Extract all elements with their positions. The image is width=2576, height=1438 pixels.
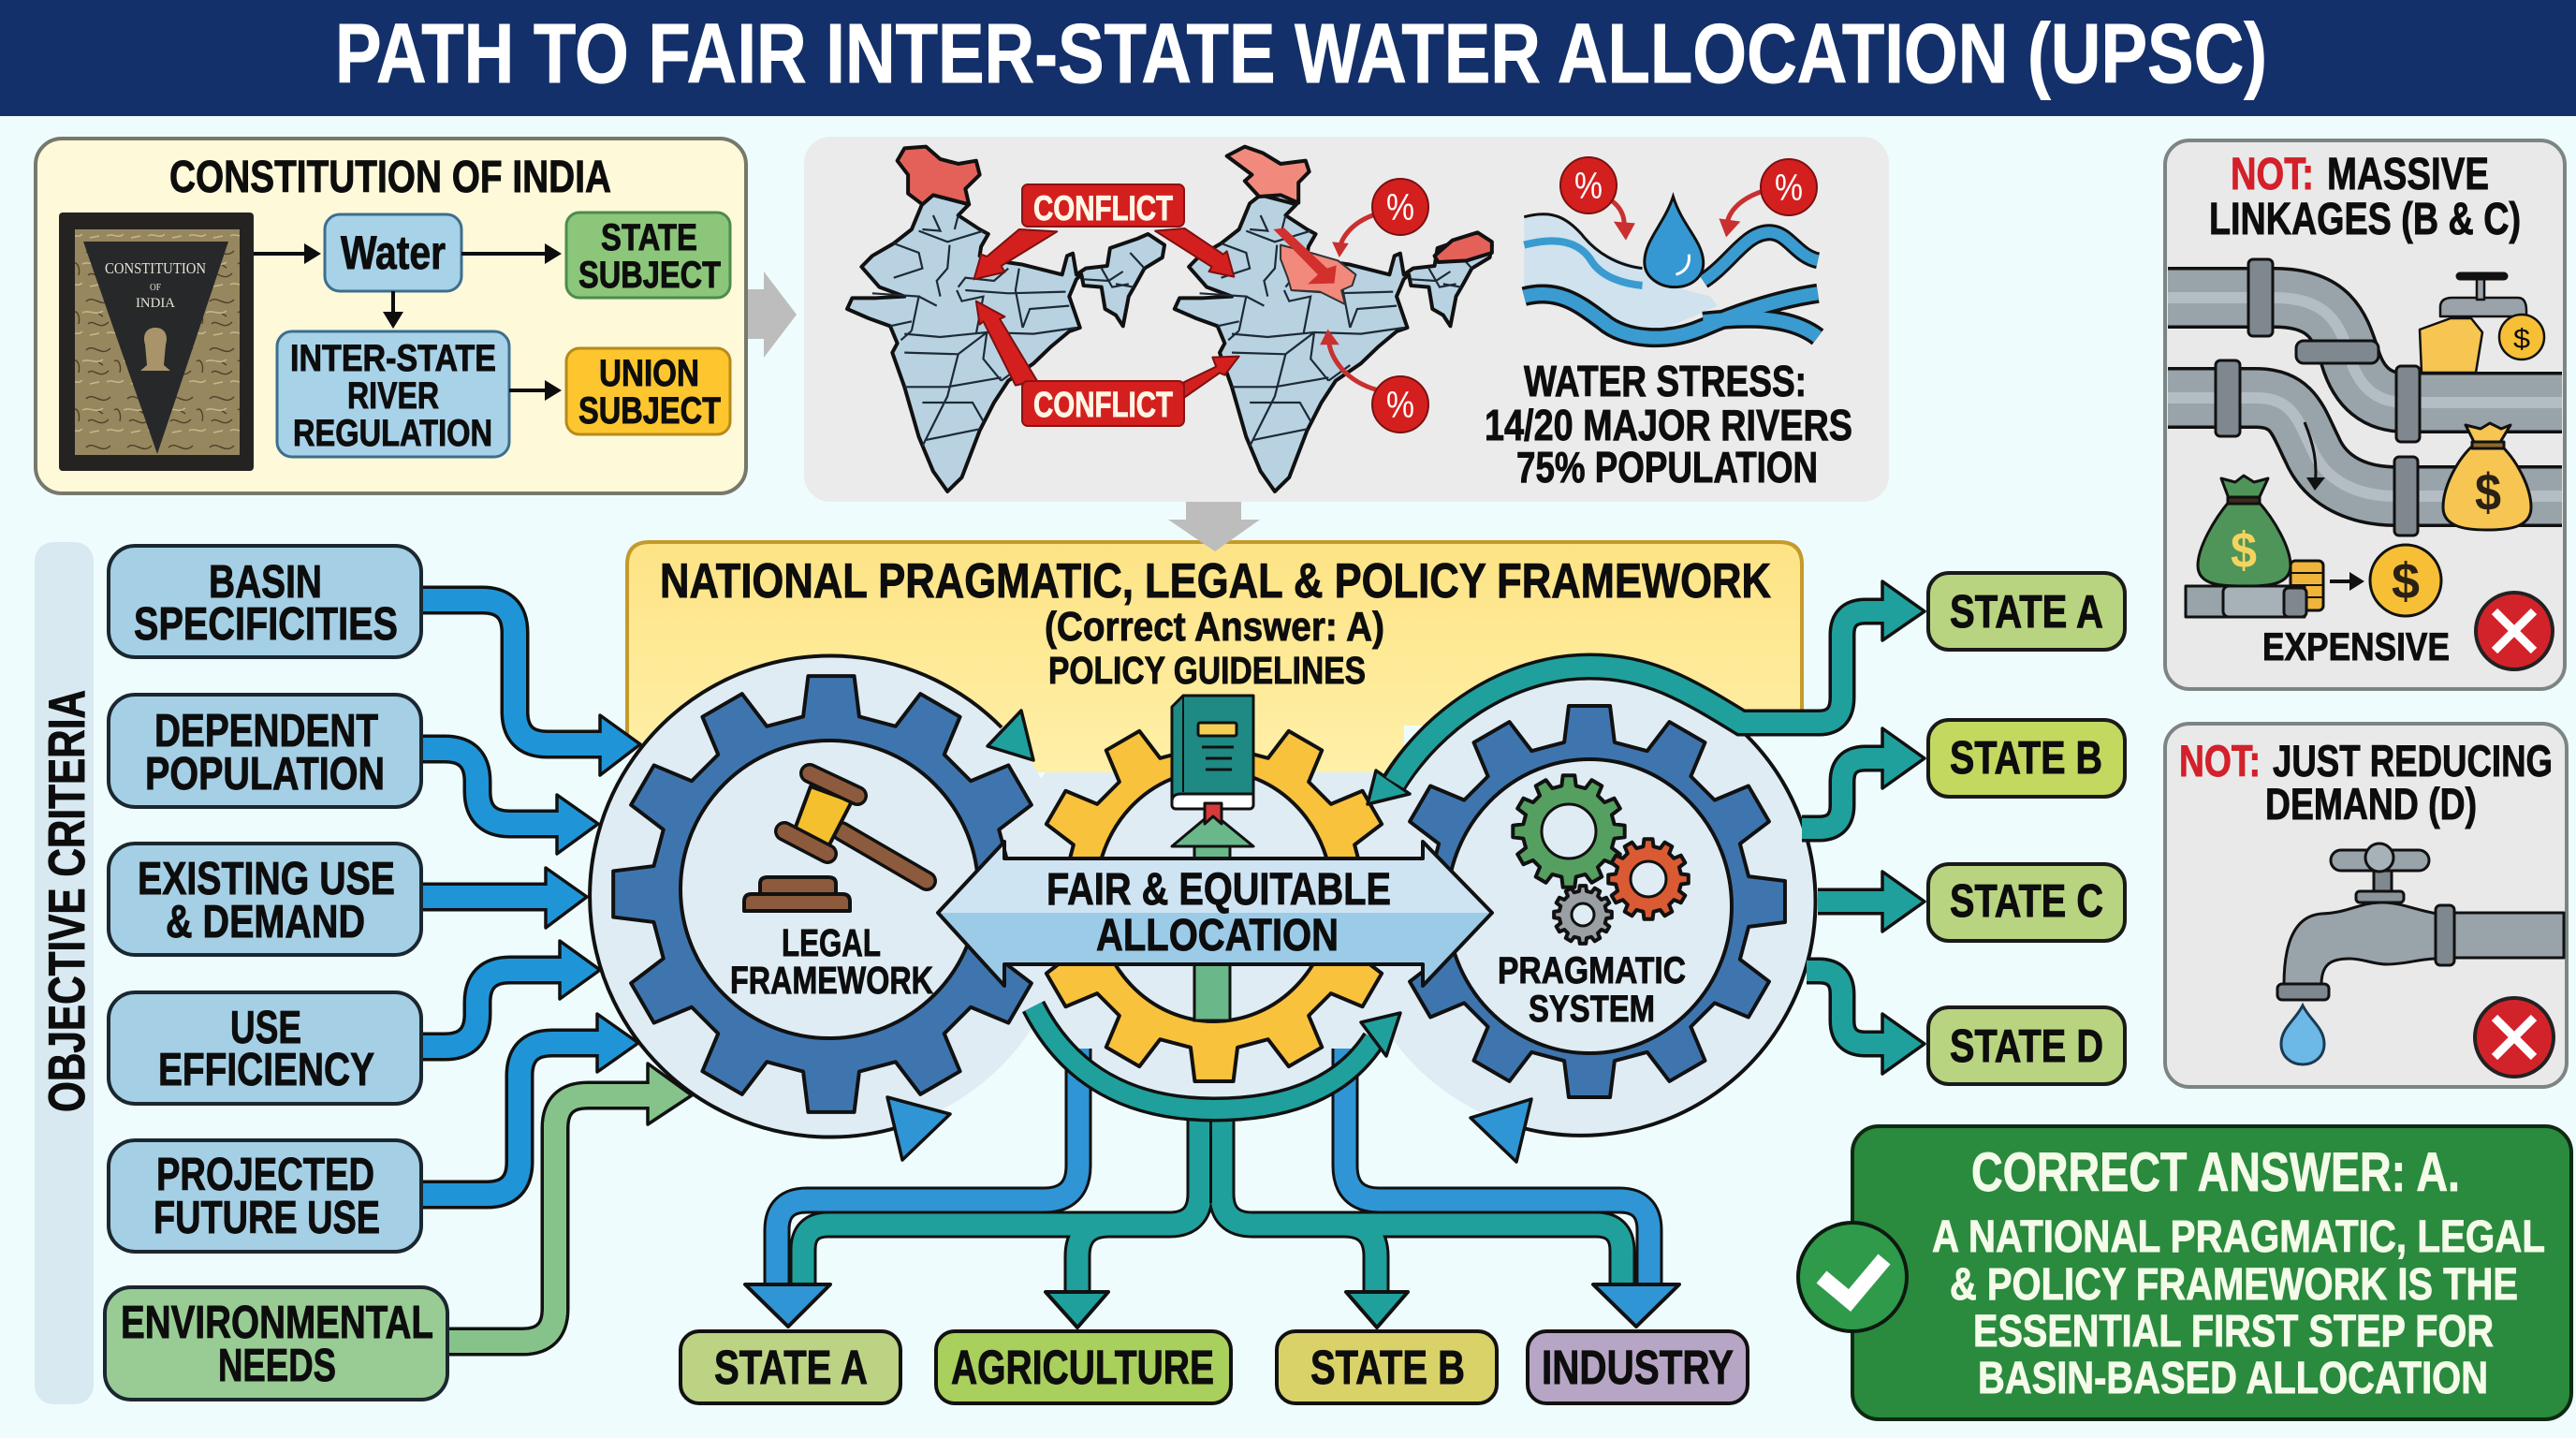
text: water stress: 14/20 MAJOR RIVERS xyxy=(1485,401,1852,449)
state d: STATE D xyxy=(1950,1021,2103,1072)
label: pragmatic system xyxy=(1498,950,1686,1030)
heading xyxy=(2179,736,2553,829)
icon: constitution book: OF xyxy=(150,283,161,293)
criterion: environmental needs: NEEDS xyxy=(218,1341,336,1391)
arrows: constitution flow xyxy=(254,243,562,401)
icon: water drop xyxy=(2281,1005,2324,1064)
icon: green money bag with coins xyxy=(2186,476,2323,617)
teal branches xyxy=(803,1105,1622,1294)
icon: small cogs xyxy=(1513,775,1689,944)
arc under central gear xyxy=(1033,1006,1400,1109)
state a xyxy=(1928,573,2125,650)
criterion: use efficiency: USE xyxy=(230,1003,301,1053)
sector: industry xyxy=(1528,1331,1748,1403)
criterion: existing use and demand: & DEMAND xyxy=(166,897,365,947)
label: policy guidelines: POLICY GUIDELINES xyxy=(1048,649,1366,692)
gear: pragmatic blue xyxy=(1394,668,1816,1136)
state b: STATE B xyxy=(1950,733,2102,784)
criterion: existing use and demand xyxy=(109,844,421,955)
sector: state a xyxy=(681,1331,900,1403)
illustration: rivers and water drop xyxy=(1524,197,1818,338)
arrow: fair and equitable allocation: ALLOCATION xyxy=(1096,911,1339,961)
criterion: projected future use: FUTURE USE xyxy=(154,1193,380,1243)
icon: small house and tap: $ xyxy=(2513,324,2530,355)
icon: green money bag with coins: $ xyxy=(2231,522,2257,579)
criterion: dependent population: POPULATION xyxy=(145,749,385,800)
criterion: projected future use: PROJECTED xyxy=(156,1150,374,1200)
state boxes right xyxy=(1928,573,2125,1084)
label: conflict bottom: CONFLICT xyxy=(1033,386,1173,425)
heading: NOT: xyxy=(2231,150,2314,199)
gear: policy yellow xyxy=(1032,716,1397,1081)
text: water stress: WATER STRESS: xyxy=(1524,357,1807,405)
icon: network of pipes xyxy=(2168,259,2562,536)
heading: DEMAND (D) xyxy=(2265,779,2477,829)
box: union subject: UNION xyxy=(599,353,699,394)
heading: CORRECT ANSWER: A. xyxy=(1971,1142,2460,1203)
panel: correct answer xyxy=(1798,1126,2571,1419)
icons: percent badges: % xyxy=(1386,187,1414,228)
text: water stress: 75% POPULATION xyxy=(1516,443,1818,492)
heading xyxy=(2209,150,2521,244)
sector: agriculture xyxy=(936,1331,1231,1403)
arrow: grey conflict to framework xyxy=(1168,502,1260,551)
state c xyxy=(1928,864,2125,941)
icons: percent badges: % xyxy=(1775,168,1803,209)
icons: percent badges: % xyxy=(1574,166,1603,207)
answer text: BASIN-BASED ALLOCATION xyxy=(1978,1354,2488,1403)
criterion: use efficiency: EFFICIENCY xyxy=(158,1045,374,1095)
criterion: basin specificities: BASIN xyxy=(209,557,322,608)
box: inter-state river regulation xyxy=(277,331,509,457)
criterion: basin specificities xyxy=(109,546,421,657)
icon: constitution book: INDIA xyxy=(136,296,175,311)
heading: MASSIVE xyxy=(2327,150,2489,199)
arrowheads: gear rotation xyxy=(887,711,1531,1162)
box: state subject: SUBJECT xyxy=(578,255,721,296)
subheading: (Correct Answer: A) xyxy=(1045,604,1384,650)
criterion: use efficiency xyxy=(109,992,421,1104)
icon: policy book xyxy=(1172,696,1253,824)
icon: gold coin: $ xyxy=(2392,553,2420,609)
arrow: fair and equitable allocation: FAIR & EQUITABLE xyxy=(1046,865,1391,915)
heading: NATIONAL PRAGMATIC, LEGAL & POLICY FRAMEWORK xyxy=(660,554,1771,609)
criterion: dependent population: DEPENDENT xyxy=(154,706,378,756)
box: union subject xyxy=(566,348,730,434)
panel: objective criteria band: OBJECTIVE CRITERIA xyxy=(37,690,95,1112)
box: state subject xyxy=(566,213,730,298)
label: pragmatic system: SYSTEM xyxy=(1529,989,1655,1030)
text: water stress xyxy=(1485,357,1852,492)
label: legal framework xyxy=(730,921,933,1002)
arrows: conflict xyxy=(974,228,1239,398)
icon: water tap xyxy=(2277,844,2564,1000)
side gear discs xyxy=(591,655,1816,1137)
arrowheads xyxy=(745,1284,1679,1328)
icon: yellow money bag: $ xyxy=(2475,462,2501,521)
icon: constitution book xyxy=(59,213,254,471)
central gear backdrop disc xyxy=(1003,688,1425,1109)
panel: objective criteria band xyxy=(35,542,95,1404)
arrow: to expensive coin xyxy=(2330,572,2364,591)
criterion: environmental needs: ENVIRONMENTAL xyxy=(121,1298,433,1348)
criterion: environmental needs xyxy=(105,1287,447,1400)
gear: legal blue xyxy=(590,656,1049,1137)
blue branches xyxy=(777,1049,1649,1287)
maps of india with conflict arrows xyxy=(847,147,1818,492)
box: inter-state river regulation: INTER-STATE xyxy=(290,338,496,379)
icon: red cross xyxy=(2475,998,2554,1077)
box: water xyxy=(325,214,461,291)
criterion: projected future use xyxy=(109,1140,421,1252)
panel: constitution of india xyxy=(36,139,746,493)
label: pragmatic system: PRAGMATIC xyxy=(1498,950,1686,991)
map: right india xyxy=(1175,147,1492,492)
sector: state b: STATE B xyxy=(1310,1341,1465,1394)
state b xyxy=(1928,720,2125,797)
box: union subject: SUBJECT xyxy=(578,390,721,432)
icons: percent badges xyxy=(1372,157,1817,433)
heading: NOT: xyxy=(2179,736,2261,785)
panel: not massive linkages xyxy=(2165,140,2565,689)
box: water: Water xyxy=(341,227,446,279)
arrows: criteria to legal gear xyxy=(421,600,692,1342)
criteria boxes xyxy=(105,546,447,1400)
icon: gold coin xyxy=(2370,545,2441,616)
icon: red cross xyxy=(2476,593,2553,669)
panel heading: CONSTITUTION OF INDIA xyxy=(169,153,611,202)
box: inter-state river regulation: RIVER xyxy=(347,375,439,417)
arrow: grey constitution to conflict xyxy=(748,271,797,358)
panel: national framework xyxy=(627,542,1802,772)
state d xyxy=(1928,1007,2125,1084)
label: expensive: EXPENSIVE xyxy=(2262,624,2450,668)
panel: not just reducing demand xyxy=(2165,724,2567,1087)
icon: gavel xyxy=(744,773,927,911)
label: legal framework: FRAMEWORK xyxy=(730,959,933,1002)
map: left india xyxy=(847,147,1164,492)
box: state subject: STATE xyxy=(601,217,697,258)
criterion: basin specificities: SPECIFICITIES xyxy=(134,599,398,650)
sector: agriculture: AGRICULTURE xyxy=(951,1341,1214,1394)
arrows: percent pointers xyxy=(1320,192,1761,390)
icon: yellow money bag xyxy=(2443,423,2531,530)
arrows: allocation to sectors xyxy=(745,1006,1679,1328)
answer text xyxy=(1932,1212,2545,1403)
sector: state b xyxy=(1277,1331,1497,1403)
sector boxes bottom xyxy=(681,1331,1748,1403)
icon: check badge xyxy=(1798,1223,1907,1331)
icon: constitution book: CONSTITUTION xyxy=(105,259,206,277)
arrow: fair and equitable allocation xyxy=(938,842,1492,986)
state a: STATE A xyxy=(1950,587,2103,638)
state c: STATE C xyxy=(1950,876,2103,927)
arrow: green policy stem xyxy=(1172,813,1253,1020)
criterion: existing use and demand: EXISTING USE xyxy=(138,854,395,904)
icons: percent badges: % xyxy=(1386,385,1414,426)
gears: framework machinery xyxy=(590,655,1816,1137)
panel: conflict and water stress xyxy=(804,137,1889,502)
arrows: pragmatic gear to states xyxy=(1368,581,1925,1074)
icon: small house and tap xyxy=(2420,276,2544,373)
sector: industry: INDUSTRY xyxy=(1542,1341,1734,1394)
sector: state a: STATE A xyxy=(714,1341,868,1394)
label: conflict top: CONFLICT xyxy=(1033,189,1173,227)
criterion: dependent population xyxy=(109,695,421,807)
label: legal framework: LEGAL xyxy=(782,921,881,964)
box: inter-state river regulation: REGULATION xyxy=(293,413,492,454)
